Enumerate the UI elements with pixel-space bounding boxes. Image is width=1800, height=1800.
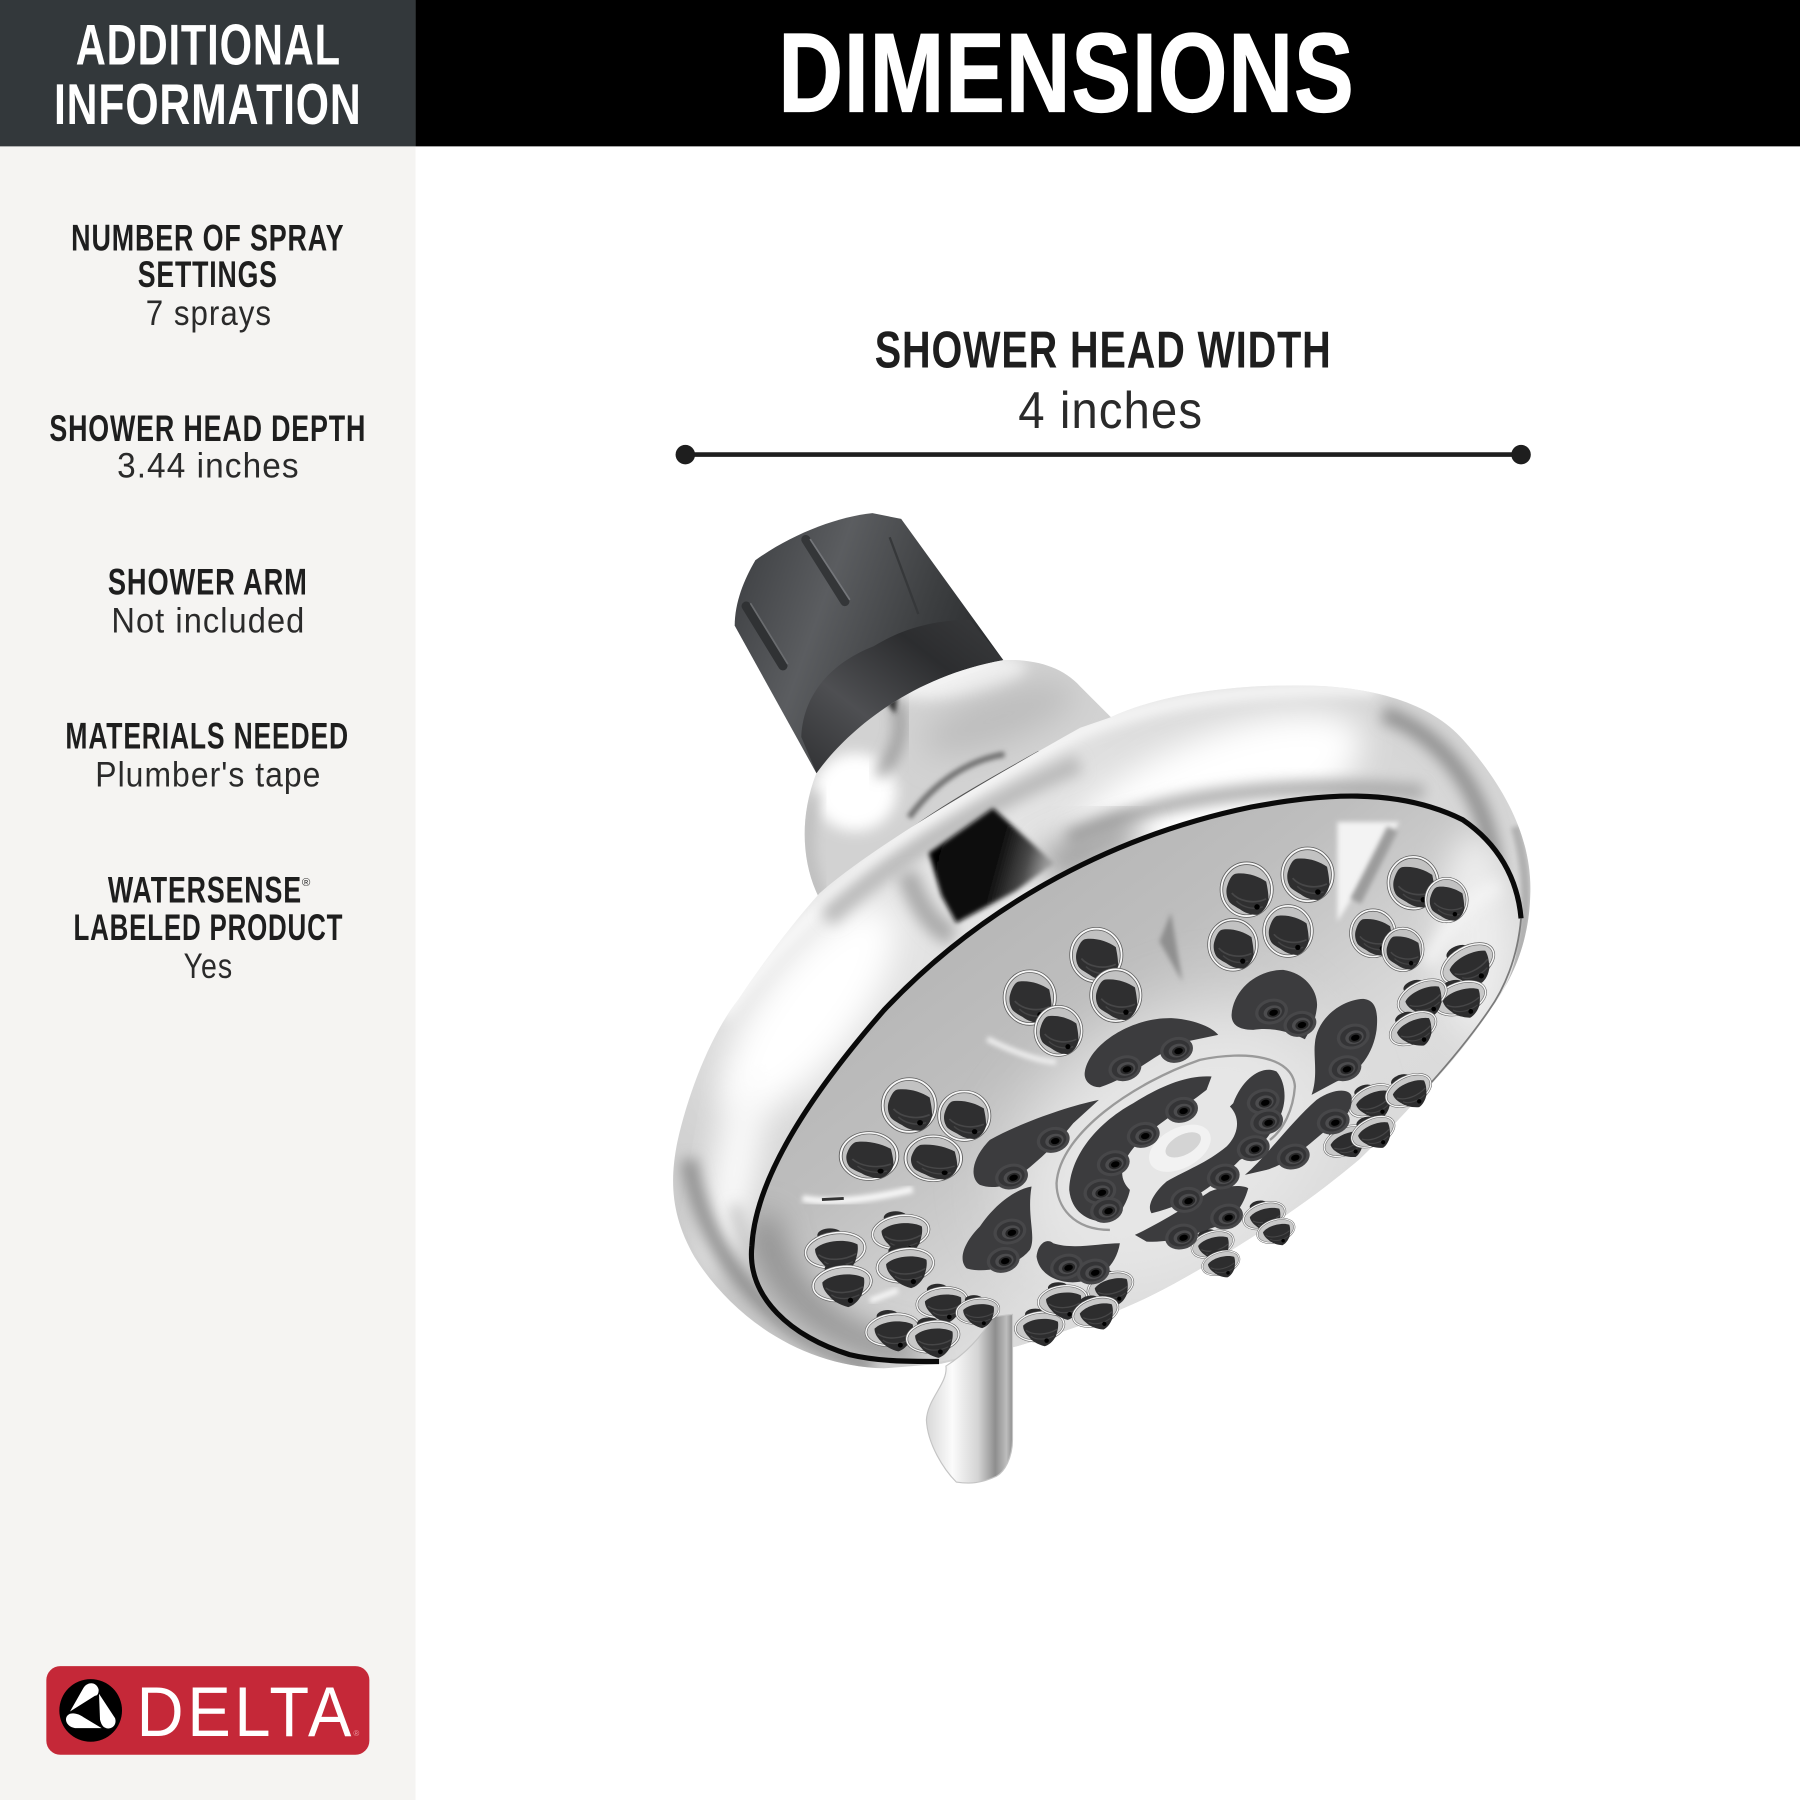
spray selector lever: [926, 1314, 1012, 1483]
sidebar header band: [0, 0, 416, 146]
spec: watersense labeled product: ®: [302, 877, 312, 889]
spec: shower arm: Not included: [111, 601, 305, 641]
title band: dimensions: [416, 0, 1800, 146]
dimension line: [676, 445, 1531, 464]
dimension label: shower head width: [875, 320, 1332, 439]
pad nozzles: [984, 995, 1373, 1288]
spec: shower head depth: 3.44 inches: [117, 446, 300, 486]
spec: watersense labeled product: Yes: [184, 946, 233, 986]
spec: materials needed: MATERIALS NEEDED: [65, 715, 349, 756]
sidebar heading: ADDITIONAL: [76, 13, 341, 77]
title band: dimensions: DIMENSIONS: [778, 9, 1355, 135]
spec: number of spray settings: [71, 217, 344, 333]
Delta logo: ®: [353, 1729, 359, 1738]
threaded connector nut: [735, 513, 1003, 775]
spec: shower arm: [108, 562, 308, 641]
sidebar heading: INFORMATION: [54, 73, 362, 137]
spec: materials needed: Plumber's tape: [95, 754, 321, 794]
dimension label: shower head width: 4 inches: [1018, 381, 1203, 439]
outer ring nozzle clusters: [803, 848, 1504, 1358]
Delta logo: DELTA: [137, 1672, 355, 1751]
dimension label: shower head width: SHOWER HEAD WIDTH: [875, 320, 1332, 378]
spec: shower head depth: [49, 408, 366, 486]
black rim gasket: [751, 796, 1521, 1361]
centre dark spray pads: [963, 970, 1377, 1288]
spec: materials needed: [65, 715, 349, 794]
spec: number of spray settings: NUMBER OF SPRAY: [71, 217, 344, 258]
panel: additional information sidebar: [0, 0, 416, 1800]
icon: Delta triangle emblem: [59, 1679, 122, 1742]
spec: watersense labeled product: LABELED PRODUCT: [73, 907, 343, 948]
spec: number of spray settings: 7 sprays: [146, 293, 272, 333]
chrome body shell: [654, 666, 1550, 1389]
thin lower-right edge line: [1429, 918, 1521, 1085]
spec: shower arm: SHOWER ARM: [108, 562, 308, 603]
chrome spray face: [754, 798, 1520, 1360]
spec: shower head depth: SHOWER HEAD DEPTH: [49, 408, 366, 449]
chrome collar: [804, 660, 1111, 896]
spec: number of spray settings: SETTINGS: [138, 254, 278, 295]
product: shower head: [654, 513, 1550, 1483]
spec: watersense labeled product: [73, 869, 343, 986]
Delta logo: [46, 1666, 369, 1755]
spec: watersense labeled product: WATERSENSE: [108, 869, 302, 910]
sidebar heading: [54, 13, 362, 137]
